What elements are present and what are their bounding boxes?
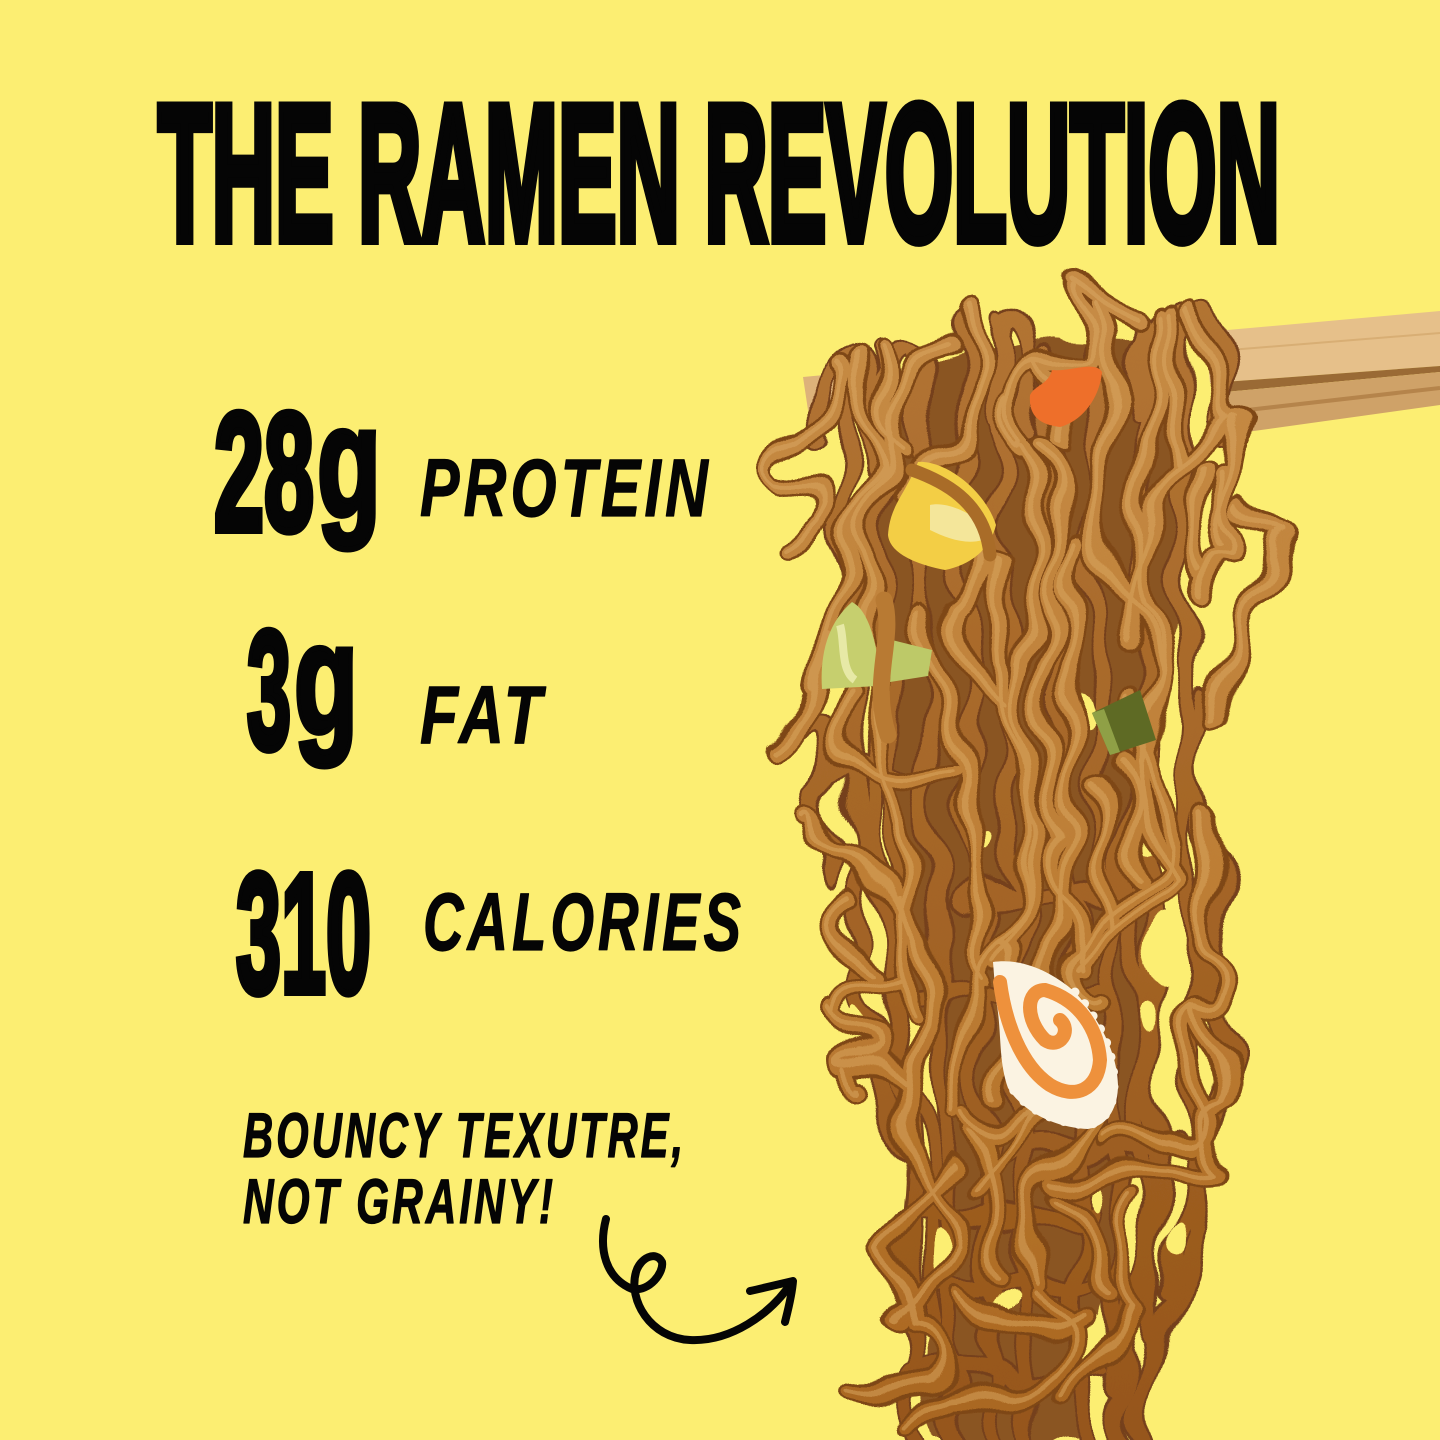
vegetable: corn bbox=[888, 462, 996, 570]
stat: 28g protein bbox=[214, 374, 712, 566]
callout text bbox=[243, 1101, 686, 1237]
narutomaki fish cake bbox=[993, 961, 1118, 1129]
callout text: BOUNCY TEXUTRE, bbox=[243, 1101, 686, 1171]
noodle bundle bbox=[765, 274, 1292, 1440]
back strands bbox=[800, 310, 1231, 1440]
chopsticks bbox=[803, 311, 1440, 434]
noodle core bbox=[875, 335, 1195, 1440]
vegetable: green pickle bbox=[822, 600, 932, 735]
label: protein: PROTEIN bbox=[420, 443, 712, 534]
arrow: curly pointer to noodles bbox=[603, 1219, 793, 1340]
stat: 310 calories bbox=[236, 839, 745, 1029]
callout text: NOT GRAINY! bbox=[243, 1167, 556, 1237]
stat: 3g fat bbox=[247, 591, 546, 784]
unit: g: g bbox=[317, 374, 381, 550]
vegetable: carrot bbox=[1030, 367, 1102, 427]
gaps between noodles bbox=[852, 695, 1188, 1373]
front strands bbox=[767, 275, 1292, 1430]
label: fat: FAT bbox=[420, 670, 546, 761]
stat: 3g fat: 3 bbox=[247, 596, 291, 784]
unit: g: g bbox=[294, 591, 358, 767]
number: 28: 28 bbox=[214, 378, 314, 566]
stat: 310 calories: 310 bbox=[236, 839, 371, 1029]
vegetable: zucchini bbox=[1092, 690, 1156, 755]
label: calories: CALORIES bbox=[423, 877, 745, 968]
